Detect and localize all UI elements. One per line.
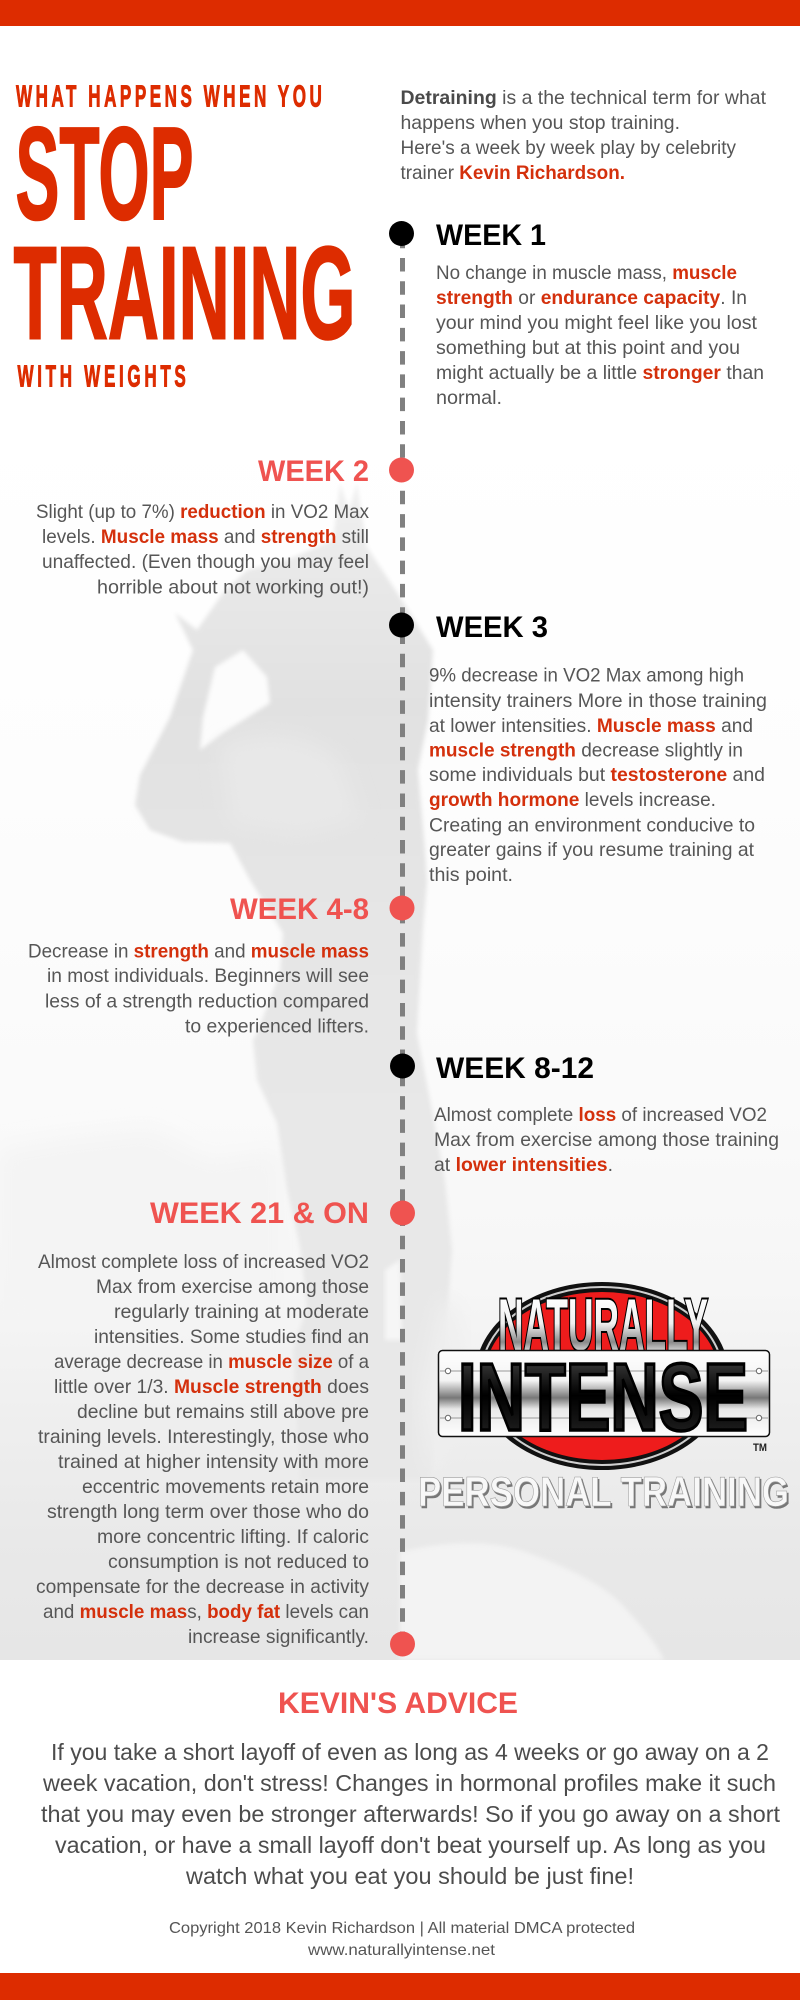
advice text: week vacation, don't stress! Changes in hormonal profiles make it such <box>42 1770 776 1796</box>
heading: kevin's advice: KEVIN'S ADVICE <box>278 1687 518 1720</box>
text: week 21 and on: compensate for the decrease in activity <box>36 1576 369 1598</box>
title: STOP <box>16 100 194 247</box>
title <box>14 79 356 394</box>
text: week 21 and on: and muscle mass, body fat levels can <box>43 1601 369 1623</box>
advice text <box>41 1739 781 1889</box>
text: week 21 and on: training levels. Interestingly, those who <box>38 1426 369 1448</box>
text: week 21 and on: more concentric lifting. If caloric <box>97 1526 369 1548</box>
text: week 21 and on: Max from exercise among those <box>96 1276 369 1298</box>
text: week 3: this point. <box>429 864 513 886</box>
copyright: Copyright 2018 Kevin Richardson | All material DMCA protected <box>169 1920 635 1937</box>
text: week 4-8: in most individuals. Beginners will see <box>47 965 369 987</box>
timeline dot: week 3 <box>389 612 414 638</box>
text: week 3: 9% decrease in VO2 Max among high <box>429 664 744 686</box>
timeline dot: week 21 and on <box>390 1200 415 1226</box>
logo trademark: TM <box>753 1442 767 1454</box>
text: week 21 and on: strength long term over those who do <box>47 1501 369 1523</box>
text: week 3: some individuals but testosterone and <box>429 764 765 786</box>
text: week 1: your mind you might feel like you lost <box>436 312 758 334</box>
text: week 3: Creating an environment conducive to <box>429 814 755 836</box>
logo plate <box>438 1350 770 1436</box>
text: week 8-12: Almost complete loss of increased VO2 <box>434 1104 767 1126</box>
heading: week 4-8: WEEK 4-8 <box>230 893 369 926</box>
text: week 3: intensity trainers More in those training <box>429 690 767 712</box>
timeline end dot <box>390 1632 415 1656</box>
text: week 3: muscle strength decrease slightly in <box>429 740 743 762</box>
title line: with weights: WITH WEIGHTS <box>18 359 186 394</box>
heading: week 1: WEEK 1 <box>436 219 546 252</box>
text: week 3: at lower intensities. Muscle mass and <box>429 715 753 737</box>
advice text: watch what you eat you should be just fine! <box>185 1863 634 1889</box>
text: week 21 and on: consumption is not reduced to <box>108 1551 369 1573</box>
text: week 21 and on: intensities. Some studies find an <box>94 1326 369 1348</box>
text: week 2: levels. Muscle mass and strength still <box>42 526 369 548</box>
timeline dot: week 4-8 <box>390 896 414 920</box>
heading: week 8-12: WEEK 8-12 <box>436 1052 594 1085</box>
advice text: that you may even be stronger afterwards! So if you go away on a short <box>41 1801 781 1827</box>
title word: training: TRAINING <box>14 220 356 366</box>
text: week 21 and on: increase significantly. <box>188 1626 369 1648</box>
text: week 2 <box>36 501 369 598</box>
text: week 1: something but at this point and you <box>436 337 740 359</box>
logo oval <box>475 1282 729 1470</box>
text: week 21 and on: trained at higher intensity with more <box>58 1451 369 1473</box>
text: week 2: Slight (up to 7%) reduction in VO2 Max <box>36 501 369 523</box>
text: week 1 <box>436 262 764 409</box>
timeline dot: week 8-12 <box>390 1054 415 1078</box>
intro text: happens when you stop training. <box>400 112 680 134</box>
bottom red bar <box>0 1973 800 2000</box>
copyright <box>169 1920 635 1959</box>
intro text: Detraining is a the technical term for what <box>400 87 767 109</box>
timeline dot: week 2 <box>389 458 414 482</box>
text: week 8-12: Max from exercise among those training <box>434 1129 779 1151</box>
text: week 21 and on <box>36 1251 369 1648</box>
text: week 1: normal. <box>436 387 502 409</box>
timeline dashed line <box>400 235 405 1640</box>
text: week 21 and on: Almost complete loss of increased VO2 <box>38 1251 369 1273</box>
title line: what happens when you: WHAT HAPPENS WHEN YOU <box>16 79 322 114</box>
timeline dot: week 1 <box>389 221 414 246</box>
intro text: Here's a week by week play by celebrity <box>400 137 736 159</box>
text: week 1: strength or endurance capacity. In <box>436 287 747 309</box>
text: week 4-8: to experienced lifters. <box>185 1016 369 1038</box>
text: week 3: greater gains if you resume training at <box>429 839 755 861</box>
text: week 1: No change in muscle mass, muscle <box>436 262 737 284</box>
heading: week 2: WEEK 2 <box>258 455 369 488</box>
heading: week 3: WEEK 3 <box>436 611 548 644</box>
text: week 21 and on: eccentric movements retain more <box>82 1476 369 1498</box>
text: week 21 and on: little over 1/3. Muscle strength does <box>54 1376 369 1398</box>
heading: week 21 and on: WEEK 21 & ON <box>150 1197 369 1230</box>
intro text <box>400 87 767 184</box>
text: week 1: might actually be a little stronger than <box>436 362 764 384</box>
text: week 4-8 <box>28 940 369 1038</box>
text: week 21 and on: regularly training at moderate <box>114 1301 369 1323</box>
text: week 2: unaffected. (Even though you may feel <box>42 551 369 573</box>
text: week 8-12 <box>434 1104 779 1176</box>
advice text: vacation, or have a small layoff don't beat yourself up. As long as you <box>55 1832 766 1858</box>
text: week 8-12: at lower intensities. <box>434 1154 613 1176</box>
text: week 4-8: Decrease in strength and muscle mass <box>28 940 369 962</box>
copyright: www.naturallyintense.net <box>307 1942 496 1959</box>
advice text: If you take a short layoff of even as long as 4 weeks or go away on a 2 <box>51 1739 769 1765</box>
top red bar <box>0 0 800 26</box>
text: week 4-8: less of a strength reduction compared <box>45 990 369 1012</box>
background photo: faded bodybuilder and skyline <box>0 415 800 1690</box>
text: week 3: growth hormone levels increase. <box>429 789 716 811</box>
text: week 3 <box>429 664 767 886</box>
text: week 21 and on: decline but remains still above pre <box>77 1401 369 1423</box>
logo: naturally intense personal training <box>418 1282 789 1515</box>
intro text: trainer Kevin Richardson. <box>400 162 625 184</box>
text: week 21 and on: average decrease in muscle size of a <box>54 1351 369 1373</box>
text: week 2: horrible about not working out!) <box>97 576 369 598</box>
